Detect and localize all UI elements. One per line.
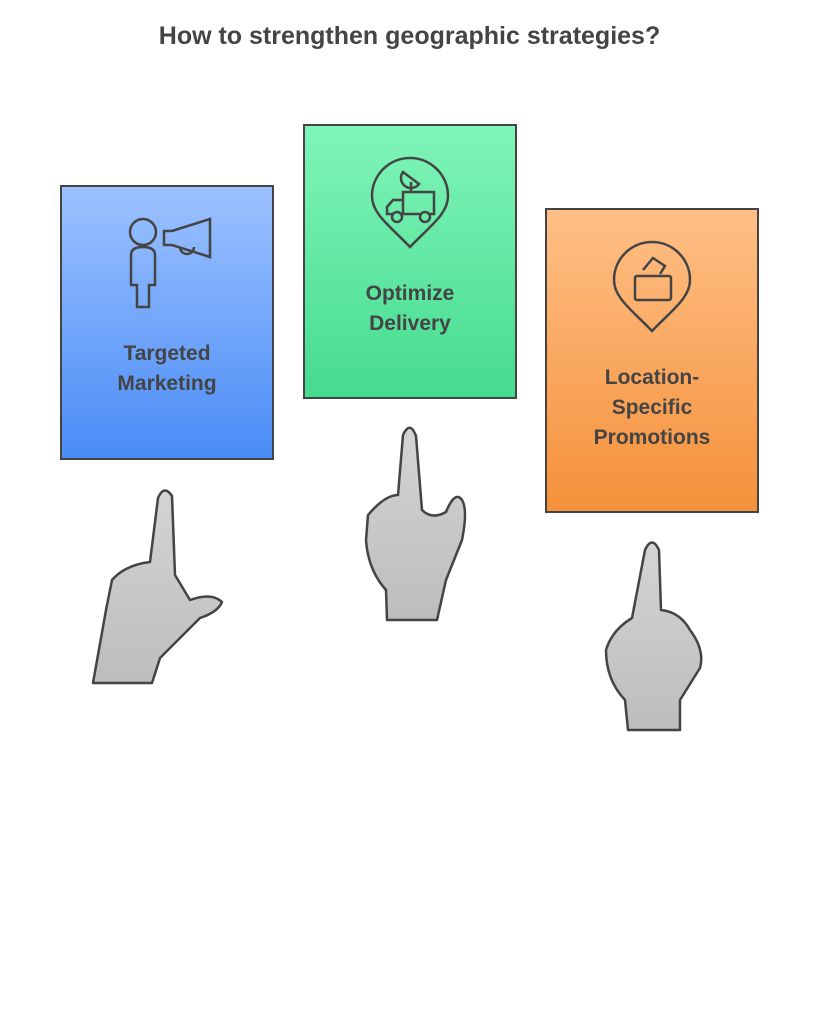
- label: Optimize: [366, 282, 454, 305]
- label: Delivery: [369, 312, 451, 335]
- label: [117, 342, 217, 395]
- panel: optimize delivery: [303, 124, 517, 399]
- icon: map pin with truck: [370, 156, 450, 249]
- panel: location-specific promotions: [545, 208, 759, 513]
- icon: map pin with ballot: [612, 240, 692, 333]
- label: Marketing: [117, 372, 217, 395]
- label: Location-: [605, 366, 699, 389]
- label: [366, 282, 454, 335]
- panel: targeted marketing: [60, 185, 274, 460]
- label: Targeted: [123, 342, 211, 365]
- hand 1: [93, 490, 222, 683]
- label: Specific: [612, 396, 692, 419]
- label: [594, 366, 710, 449]
- hand 2: [366, 428, 465, 620]
- title: How to strengthen geographic strategies?: [159, 22, 660, 50]
- label: Promotions: [594, 426, 710, 449]
- hand 3: [606, 542, 701, 730]
- icon: person with megaphone: [128, 217, 212, 308]
